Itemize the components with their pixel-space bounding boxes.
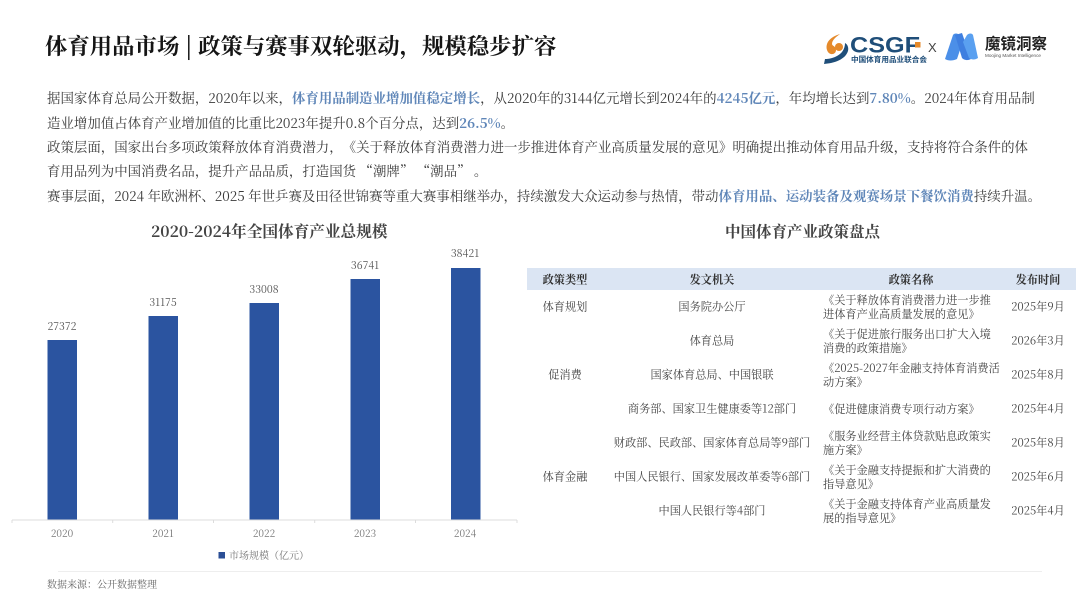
body text — [47, 88, 1041, 205]
table header — [527, 268, 1076, 290]
table title: 中国体育产业政策盘点 — [725, 220, 880, 242]
chart title: 2020-2024年全国体育产业总规模 — [151, 220, 387, 242]
category: consumption: 促消费 — [548, 366, 582, 382]
bar 2021: 31175 — [149, 295, 177, 310]
column header: issuer: 发文机关 — [690, 271, 734, 287]
category: finance: 体育金融 — [543, 468, 587, 484]
row 1 policy: 《关于释放体育消费潜力进一步推 — [823, 292, 991, 308]
bar 2023 — [350, 258, 380, 540]
text: CSGF wordmark: CSGF — [850, 32, 920, 58]
row 5 policy: 施方案》 — [823, 442, 868, 458]
row 3 date: 2025年8月 — [1011, 366, 1065, 382]
row 3 policy — [823, 360, 1000, 390]
bar chart — [12, 246, 518, 562]
bar 2022: 2022 — [253, 525, 276, 540]
row 7 issuer: 中国人民银行等4部门 — [659, 502, 765, 518]
row 5 policy: 《服务业经营主体贷款贴息政策实 — [823, 428, 991, 444]
bar 2021 — [148, 295, 178, 540]
text: Moojing wordmark: 魔镜洞察 — [985, 32, 1048, 54]
row 5 policy — [823, 428, 991, 458]
row 6 date: 2025年6月 — [1011, 468, 1065, 484]
row 1 issuer: 国务院办公厅 — [678, 298, 746, 314]
bar 2023: 36741 — [351, 258, 379, 273]
row 3 issuer: 国家体育总局、中国银联 — [650, 366, 774, 382]
row 2 issuer: 体育总局 — [690, 332, 734, 348]
text: Moojing subtitle: Moojing Market Intelligence — [985, 53, 1041, 58]
data source: 数据来源：公开数据整理 — [47, 576, 157, 591]
title: 体育用品市场 | 政策与赛事双轮驱动，规模稳步扩容 — [45, 29, 556, 61]
row 5 issuer: 财政部、民政部、国家体育总局等9部门 — [614, 434, 810, 450]
bar 2024: 38421 — [451, 246, 479, 261]
row 1 date: 2025年9月 — [1011, 298, 1065, 314]
row 6 policy — [823, 462, 991, 492]
row 3 policy: 动方案》 — [823, 374, 868, 390]
text: cross mark: X — [928, 40, 937, 55]
bar 2024 — [451, 246, 480, 540]
row 1 policy: 进体育产业高质量发展的意见》 — [823, 306, 980, 322]
row 4 policy: 《促进健康消费专项行动方案》 — [823, 401, 980, 417]
row 2 policy: 消费的政策措施》 — [823, 340, 913, 356]
paragraph: events: 赛事层面，2024 年欧洲杯、2025 年世乒赛及田径世锦赛等重大赛事相继举办，持续激发大众运动参与热情，带动体育用品、运动装备及观赛场景下餐饮消费持续升温。 — [47, 186, 1041, 205]
bar 2020 — [47, 319, 77, 540]
icon: CSGF swirl — [824, 34, 848, 64]
column header: policy: 政策名称 — [889, 271, 933, 287]
legend: 市场规模（亿元） — [229, 547, 309, 562]
paragraph: manufacturing line 1: 据国家体育总局公开数据，2020年以来，体育用品制造业增加值稳定增长，从2020年的3144亿元增长到2024年的4245亿元，年均增长达到7.80%。2024年体育用品制 — [47, 88, 1035, 107]
row 2 policy: 《关于促进旅行服务出口扩大入境 — [823, 326, 991, 342]
row 2 policy — [823, 326, 991, 356]
row 7 policy: 《关于金融支持体育产业高质量发 — [823, 496, 991, 512]
row 7 policy: 展的指导意见》 — [823, 510, 901, 526]
row 6 policy: 《关于金融支持提振和扩大消费的 — [823, 462, 991, 478]
column header: type: 政策类型 — [543, 271, 587, 287]
paragraph: policy line 1: 政策层面，国家出台多项政策释放体育消费潜力，《关于释放体育消费潜力进一步推进体育产业高质量发展的意见》明确提出推动体育用品升级，支持将符合条件的体 — [47, 137, 1028, 156]
row 3 policy: 《2025-2027年金融支持体育消费活 — [823, 360, 1000, 376]
bar 2023: 2023 — [354, 525, 376, 540]
column header: date: 发布时间 — [1016, 271, 1060, 287]
row 6 issuer: 中国人民银行、国家发展改革委等6部门 — [614, 468, 810, 484]
bar 2020: 2020 — [51, 525, 74, 540]
bar 2020: 27372 — [47, 319, 77, 334]
row 4 issuer: 商务部、国家卫生健康委等12部门 — [628, 400, 796, 416]
row 7 date: 2025年4月 — [1011, 502, 1065, 518]
bar 2024: 2024 — [454, 525, 477, 540]
row 5 date: 2025年8月 — [1011, 434, 1065, 450]
bar 2022 — [249, 282, 279, 540]
text: CSGF subtitle: 中国体育用品业联合会 — [851, 54, 927, 65]
icon: orange square in F — [915, 42, 920, 48]
bar 2022: 33008 — [249, 282, 279, 297]
row 6 policy: 指导意见》 — [823, 476, 879, 492]
category: planning: 体育规划 — [543, 298, 587, 314]
row 4 date: 2025年4月 — [1011, 400, 1065, 416]
logos — [824, 32, 1048, 65]
paragraph: policy line 2: 育用品列为中国消费名品，提升产品品质，打造国货 “潮牌” “潮品” 。 — [47, 161, 487, 180]
policy table — [527, 268, 1076, 290]
row 1 policy — [823, 292, 991, 322]
bar 2021: 2021 — [152, 525, 174, 540]
row 2 date: 2026年3月 — [1011, 332, 1065, 348]
icon: M logo — [945, 33, 978, 60]
paragraph: manufacturing line 2: 造业增加值占体育产业增加值的比重比2023年提升0.8个百分点，达到26.5%。 — [47, 113, 514, 132]
row 7 policy — [823, 496, 991, 526]
